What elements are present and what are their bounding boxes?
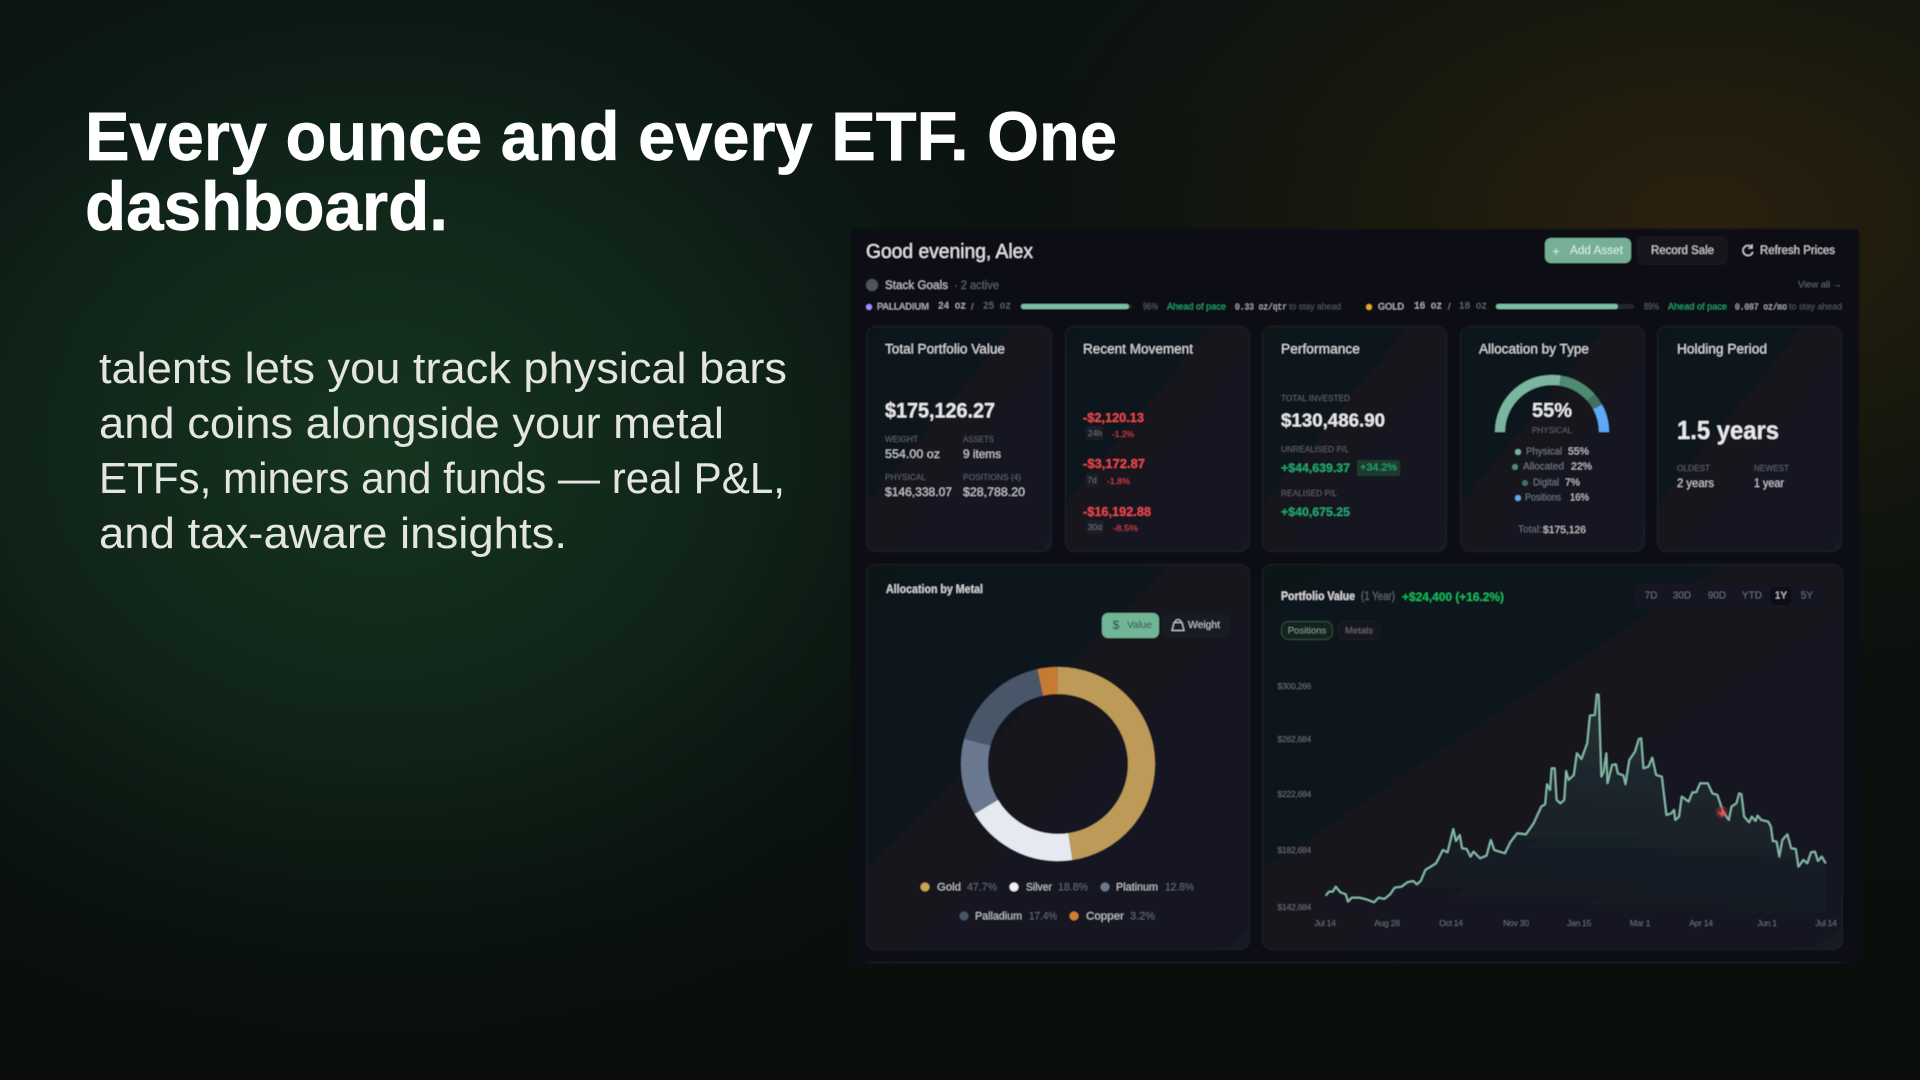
range selector: 5Y xyxy=(1801,590,1813,602)
goal: gold: to stay ahead xyxy=(1789,302,1842,312)
panel: recent movement: -$2,120.13 xyxy=(1083,411,1144,425)
donut legend: Palladium xyxy=(975,910,1022,922)
panel: performance: $130,486.90 xyxy=(1281,410,1385,430)
chart heading: +$24,400 (+16.2%) xyxy=(1402,590,1504,604)
x axis labels: Nov 30 xyxy=(1503,918,1529,928)
donut legend: 47.7% xyxy=(967,882,997,894)
x axis labels: Aug 28 xyxy=(1374,918,1400,928)
goal: gold xyxy=(1366,302,1842,312)
donut legend: Gold xyxy=(937,882,961,894)
gauge legend xyxy=(1512,446,1592,504)
goal: palladium xyxy=(866,302,1341,312)
panel: total portfolio value: ASSETS xyxy=(963,434,994,444)
gauge legend: 7% xyxy=(1565,478,1580,488)
panel: holding period: 1 year xyxy=(1754,476,1784,490)
goal: palladium: Ahead of pace xyxy=(1167,302,1226,312)
gauge legend: 55% xyxy=(1568,446,1589,458)
x axis labels xyxy=(1314,918,1837,928)
panel: recent movement: -$16,192.88 xyxy=(1083,505,1151,519)
goal: gold: 16 oz xyxy=(1414,302,1442,312)
goal: gold: Ahead of pace xyxy=(1668,302,1727,312)
chart heading: (1 Year) xyxy=(1361,591,1395,603)
panel: performance: Performance xyxy=(1281,342,1360,356)
button: add asset xyxy=(1545,238,1631,263)
title xyxy=(85,98,1117,245)
toggle: value xyxy=(1102,613,1159,638)
range selector: 30D xyxy=(1673,590,1691,602)
goal: gold: 18 oz xyxy=(1459,302,1487,312)
gauge legend: Digital xyxy=(1533,478,1559,488)
chart heading xyxy=(1281,590,1504,604)
panel: allocation by type: $175,126 xyxy=(1543,524,1586,536)
goal: gold: / xyxy=(1448,302,1451,312)
panel: performance: +$40,675.25 xyxy=(1281,505,1350,519)
panel: total portfolio value: $175,126.27 xyxy=(885,400,995,422)
goal: palladium: 25 oz xyxy=(983,302,1011,312)
x axis labels: Jan 15 xyxy=(1567,918,1592,928)
toggle: weight: Weight xyxy=(1188,619,1220,631)
panel: allocation by type xyxy=(1460,326,1644,552)
x axis labels: Oct 14 xyxy=(1439,918,1463,928)
description text: and tax-aware insights. xyxy=(99,509,567,558)
range selector: 7D xyxy=(1645,590,1657,602)
panel: holding period: 1.5 years xyxy=(1677,415,1779,445)
tabs xyxy=(1282,622,1380,640)
description text: and coins alongside your metal xyxy=(99,399,724,448)
button: add asset: Add Asset xyxy=(1570,245,1624,257)
panel: total portfolio value xyxy=(866,326,1052,552)
panel: recent movement xyxy=(1066,326,1250,552)
line chart xyxy=(1326,694,1826,918)
button: add asset: + xyxy=(1552,244,1560,258)
button: record sale: Record Sale xyxy=(1651,245,1714,257)
toggle: weight xyxy=(1162,613,1230,638)
gauge legend: 16% xyxy=(1570,492,1589,504)
dashboard bottom edge xyxy=(866,962,1842,963)
panel: performance: +34.2% xyxy=(1360,462,1397,474)
stack goals header: · 2 active xyxy=(954,280,999,292)
y axis labels: $142,684 xyxy=(1278,902,1312,912)
range selector: 1Y xyxy=(1775,590,1787,602)
panel: performance: REALISED P/L xyxy=(1281,488,1337,498)
stack goals header xyxy=(866,279,1842,292)
panel: allocation by metal: Allocation by Metal xyxy=(886,582,983,596)
y axis labels: $182,684 xyxy=(1278,845,1312,855)
description text xyxy=(99,344,787,558)
panel: total portfolio value: 554.00 oz xyxy=(885,447,940,461)
goal: palladium: PALLADIUM xyxy=(877,302,929,312)
goal: gold: 89% xyxy=(1644,302,1659,312)
gauge legend: Allocated xyxy=(1523,462,1564,472)
panel: recent movement: 24h xyxy=(1088,428,1102,438)
toggle: value: Value xyxy=(1127,619,1152,631)
panel: recent movement: -1.8% xyxy=(1107,476,1130,486)
chart heading: Portfolio Value xyxy=(1281,591,1355,603)
panel: holding period: 2 years xyxy=(1677,476,1714,490)
panel: performance: UNREALISED P/L xyxy=(1281,444,1349,454)
donut legend: 17.4% xyxy=(1029,910,1057,922)
greeting heading: Good evening, Alex xyxy=(866,241,1033,263)
y axis labels: $262,684 xyxy=(1278,734,1312,744)
panel: total portfolio value: $28,788.20 xyxy=(963,485,1025,499)
description text: talents lets you track physical bars xyxy=(99,344,787,393)
panel: total portfolio value: 9 items xyxy=(963,447,1001,461)
goal: palladium: 0.33 oz/qtr xyxy=(1235,302,1287,312)
x axis labels: Jul 14 xyxy=(1815,918,1837,928)
panel: holding period xyxy=(1658,326,1842,552)
donut legend: 3.2% xyxy=(1130,910,1155,922)
panel: performance xyxy=(1262,326,1446,552)
goal: gold: 0.087 oz/mo xyxy=(1735,302,1787,312)
panel: allocation by type: 55% xyxy=(1532,400,1572,422)
toggle: value: $ xyxy=(1113,618,1120,632)
button: record sale xyxy=(1637,236,1728,265)
donut legend: 18.8% xyxy=(1058,882,1088,894)
tabs: Positions xyxy=(1288,626,1327,636)
donut legend: Copper xyxy=(1086,910,1124,922)
panel: total portfolio value: POSITIONS (4) xyxy=(963,472,1021,482)
x axis labels: Mar 1 xyxy=(1630,918,1651,928)
goal: palladium: / xyxy=(971,302,974,312)
donut legend: Silver xyxy=(1026,882,1052,894)
goal: palladium: to stay ahead xyxy=(1289,302,1341,312)
donut chart xyxy=(974,680,1142,848)
panel: total portfolio value: $146,338.07 xyxy=(885,485,952,499)
panel: holding period: NEWEST xyxy=(1754,463,1789,473)
tabs: Metals xyxy=(1345,626,1373,636)
gauge legend: Positions xyxy=(1525,492,1561,504)
y axis labels: $222,684 xyxy=(1278,789,1312,799)
panel: recent movement: -8.5% xyxy=(1113,523,1138,533)
panel: total portfolio value: Total Portfolio Value xyxy=(885,342,1005,356)
description text: ETFs, miners and funds — real P&L, xyxy=(99,454,785,503)
sale marker xyxy=(1716,806,1728,818)
panel: recent movement: 7d xyxy=(1087,475,1097,485)
goal: gold: GOLD xyxy=(1378,302,1404,312)
x axis labels: Apr 14 xyxy=(1689,918,1713,928)
range selector: 90D xyxy=(1708,590,1726,602)
x axis labels: Jun 1 xyxy=(1757,918,1777,928)
panel: recent movement: -1.2% xyxy=(1112,429,1134,439)
dashboard screenshot xyxy=(851,229,1859,964)
panel: total portfolio value: PHYSICAL xyxy=(885,472,926,482)
stack goals header: Stack Goals xyxy=(885,280,948,292)
y axis labels: $300,266 xyxy=(1278,681,1312,691)
panel: allocation by type: Total: xyxy=(1518,524,1542,536)
gauge chart xyxy=(1500,380,1604,432)
range selector xyxy=(1635,584,1823,608)
donut legend: Platinum xyxy=(1116,882,1158,894)
panel: total portfolio value: WEIGHT xyxy=(885,434,918,444)
panel: recent movement: 30d xyxy=(1088,522,1102,532)
y axis labels xyxy=(1278,681,1312,912)
panel: holding period: Holding Period xyxy=(1677,342,1767,356)
panel: allocation by type: Allocation by Type xyxy=(1479,342,1589,356)
panel: portfolio value chart xyxy=(1262,564,1842,950)
panel: performance: +$44,639.37 xyxy=(1281,461,1350,475)
panel: recent movement: Recent Movement xyxy=(1083,342,1193,356)
x axis labels: Jul 14 xyxy=(1314,918,1336,928)
donut legend xyxy=(920,882,1194,922)
title: dashboard. xyxy=(85,168,448,245)
range selector: YTD xyxy=(1742,590,1762,602)
goal: palladium: 24 oz xyxy=(938,302,966,312)
goal: palladium: 96% xyxy=(1143,302,1158,312)
panel: allocation by type: PHYSICAL xyxy=(1532,425,1572,435)
button: refresh prices: Refresh Prices xyxy=(1760,245,1835,257)
panel: recent movement: -$3,172.87 xyxy=(1083,457,1145,471)
stack goals header: View all → xyxy=(1798,280,1842,290)
gauge legend: 22% xyxy=(1571,462,1592,472)
title: Every ounce and every ETF. One xyxy=(85,98,1117,175)
panel: holding period: OLDEST xyxy=(1677,463,1710,473)
donut legend: 12.8% xyxy=(1165,882,1194,894)
panel: allocation by metal xyxy=(866,564,1250,950)
panel: performance: TOTAL INVESTED xyxy=(1281,393,1350,403)
gauge legend: Physical xyxy=(1526,446,1562,458)
